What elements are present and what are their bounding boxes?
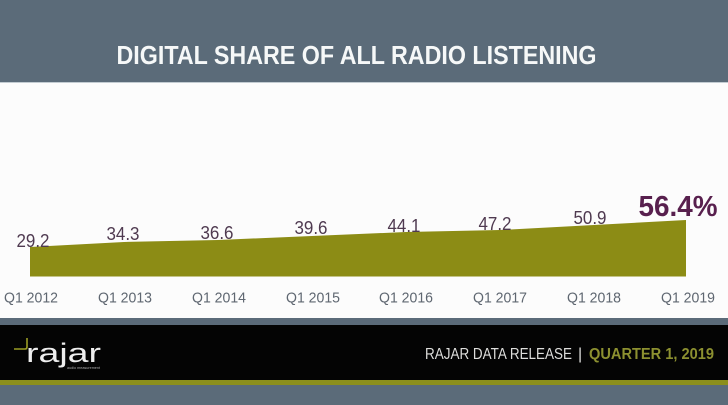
axis labels: Q1 2018 [567,290,621,306]
title: DIGITAL SHARE OF ALL RADIO LISTENING [116,42,596,70]
rajar logo [14,338,101,370]
area chart: digital share [4,191,718,306]
axis labels: Q1 2019 [661,290,715,306]
data values: 34.3 [106,224,140,244]
data values: 47.2 [478,214,512,234]
footer release text [425,346,714,363]
header band [0,0,728,83]
axis labels: Q1 2014 [192,290,246,306]
data values: 29.2 [16,231,50,251]
logo mark [14,338,27,349]
data values: 44.1 [388,216,420,236]
data values: 39.6 [294,218,328,238]
footer band [0,318,728,405]
highlighted value: 56.4% [638,191,718,223]
footer release text: RAJAR DATA RELEASE [425,346,572,363]
logo wordmark: rajar [26,338,101,368]
data values: 36.6 [200,223,234,243]
axis labels: Q1 2017 [473,290,527,306]
data values [16,208,606,251]
axis labels: Q1 2016 [379,290,433,306]
axis labels [4,290,715,306]
logo tagline: audio measurement [67,366,100,370]
chart area [30,220,686,276]
axis labels: Q1 2012 [4,290,58,306]
footer release text: QUARTER 1, 2019 [589,346,714,363]
footer release text: | [578,346,582,363]
data values: 50.9 [574,208,606,228]
axis labels: Q1 2015 [286,290,340,306]
axis labels: Q1 2013 [98,290,152,306]
